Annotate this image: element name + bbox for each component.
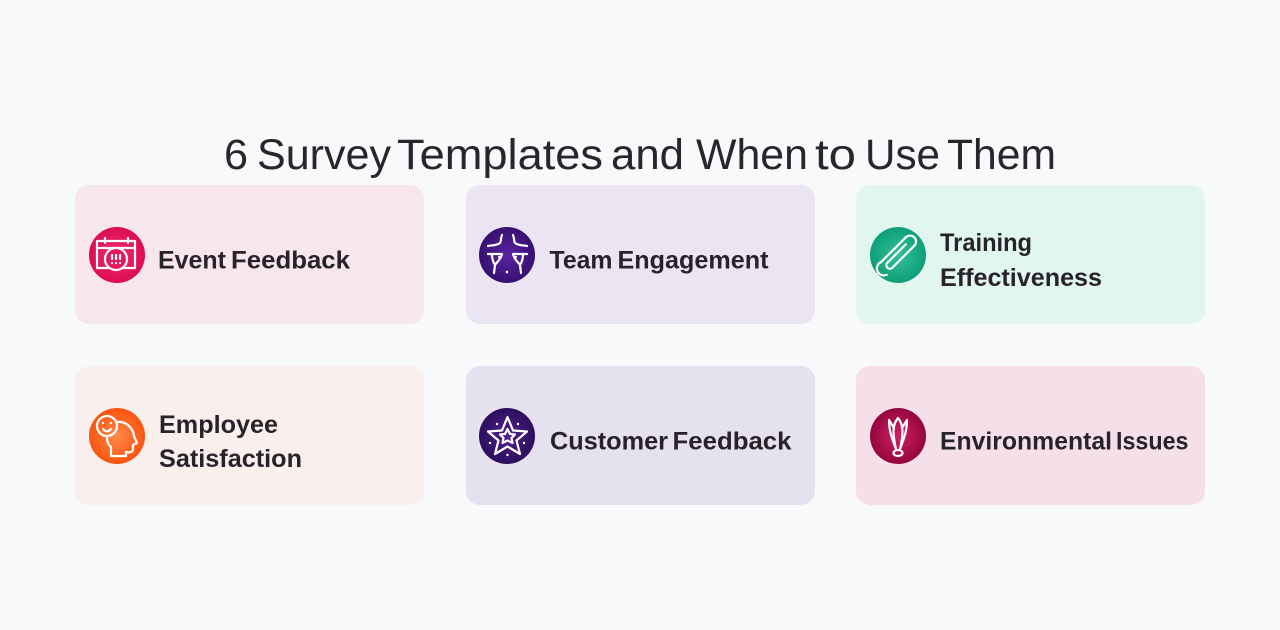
label: environmental issues	[940, 428, 1188, 456]
label: event feedback	[158, 246, 350, 274]
label: team engagement	[550, 246, 769, 274]
title: Survey	[257, 131, 391, 179]
label: employee satisfaction: Employee	[159, 411, 278, 439]
icon: paperclip	[870, 227, 926, 283]
label: customer feedback: Customer	[550, 428, 668, 456]
title: and	[611, 131, 684, 179]
panel: team engagement	[466, 185, 815, 324]
title: 6	[224, 131, 248, 179]
panel: event feedback	[75, 185, 424, 324]
panel: customer feedback	[466, 366, 815, 505]
label: training effectiveness: Training	[940, 229, 1032, 257]
panel: environmental issues	[856, 366, 1205, 505]
panel: employee satisfaction	[75, 366, 424, 505]
icon: calendar	[89, 227, 145, 283]
label: environmental issues: Issues	[1116, 428, 1188, 456]
icon: smiling head	[89, 408, 145, 464]
title: Templates	[397, 131, 603, 179]
icon: leaves	[870, 408, 926, 464]
label: event feedback: Feedback	[231, 246, 350, 274]
title	[224, 131, 1056, 179]
label: employee satisfaction	[159, 411, 302, 473]
label: team engagement: Engagement	[618, 246, 769, 274]
title: Use	[865, 131, 940, 179]
icon: torso	[479, 227, 535, 283]
panel: training effectiveness	[856, 185, 1205, 324]
label: employee satisfaction: Satisfaction	[159, 445, 302, 473]
icon: star	[479, 408, 535, 464]
label: customer feedback	[550, 428, 792, 456]
label: customer feedback: Feedback	[672, 428, 792, 456]
label: environmental issues: Environmental	[940, 428, 1112, 456]
label: training effectiveness: Effectiveness	[940, 264, 1102, 292]
label: team engagement: Team	[550, 246, 612, 274]
title: Them	[947, 131, 1056, 179]
title: to	[815, 131, 856, 179]
label: event feedback: Event	[158, 246, 227, 274]
label: training effectiveness	[940, 229, 1102, 292]
title: When	[696, 131, 808, 179]
